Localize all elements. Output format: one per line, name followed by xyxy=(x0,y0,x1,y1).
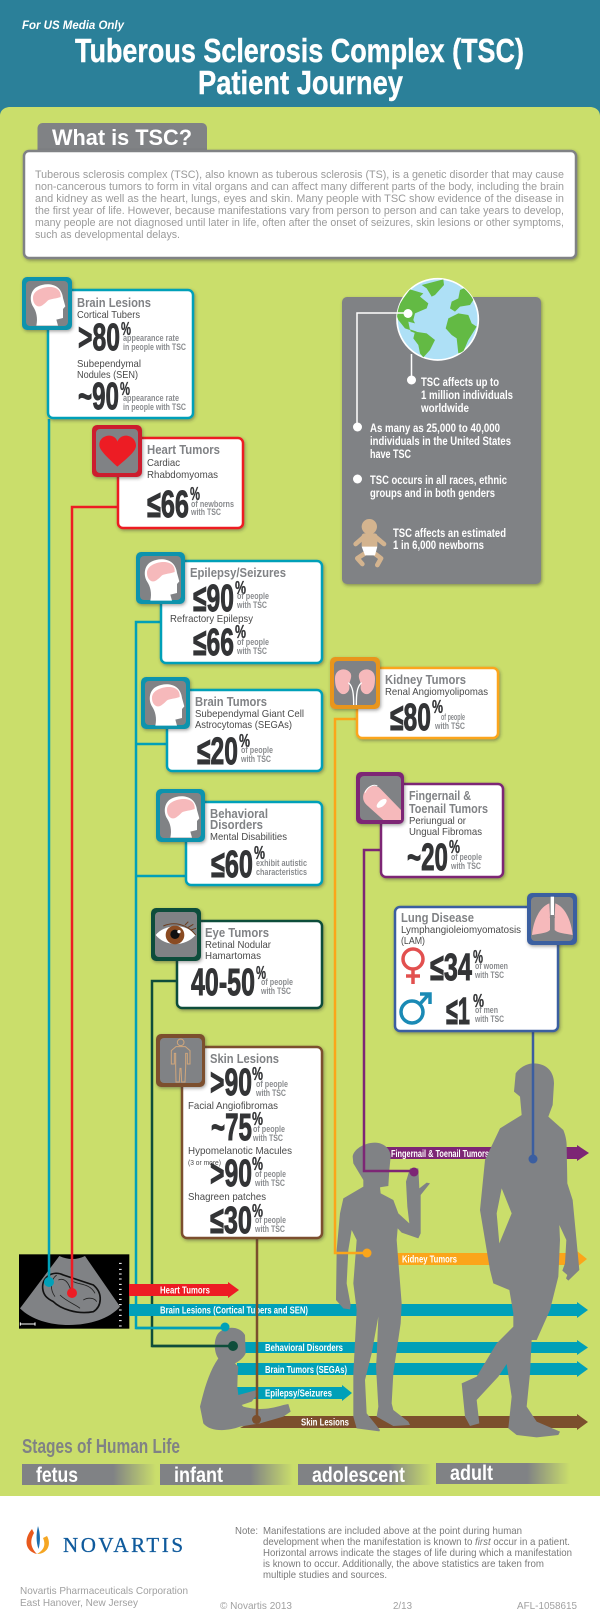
text: women statistic: with TSC xyxy=(474,970,504,981)
text: cortical tubers: Brain Lesions xyxy=(77,296,151,310)
text: mental disabilities: exhibit autistic xyxy=(256,858,307,869)
text: renal angiomyolipomas: % xyxy=(432,697,443,717)
text: skin lesions overall: Skin Lesions xyxy=(210,1052,279,1066)
fact: United States xyxy=(370,421,511,461)
panel: fingernail and toenail tumors xyxy=(356,772,503,879)
text: subependymal nodules xyxy=(77,358,186,418)
text: cardiac rhabdomyomas: with TSC xyxy=(190,507,221,518)
text: ungual fibromas: of people xyxy=(451,852,482,863)
arrow: behavioral disorders: Behavioral Disorders xyxy=(265,1343,343,1354)
stage: adolescent: adolescent xyxy=(312,1464,405,1487)
stage: infant xyxy=(160,1464,293,1487)
title xyxy=(75,32,524,101)
text: shagreen patches: with TSC xyxy=(254,1224,285,1235)
text: men statistic: of men xyxy=(475,1005,498,1016)
text: mental disabilities: Behavioral xyxy=(210,807,268,821)
text: facial angiofibromas: of people xyxy=(253,1124,285,1135)
text: retinal hamartomas: Retinal Nodular xyxy=(205,939,271,951)
text: subependymal nodules: in people with TSC xyxy=(123,402,186,413)
silhouette: adolescent xyxy=(336,1143,430,1431)
panel: lung disease xyxy=(395,893,577,1033)
media notice: For US Media Only xyxy=(22,18,125,32)
text: lymphangioleiomyomatosis: Lymphangioleiomyomatosis xyxy=(401,924,521,936)
fact: newborns xyxy=(393,526,506,552)
arrow: epilepsy: Epilepsy/Seizures xyxy=(265,1388,332,1400)
text: hypomelanotic macules: (3 or more) xyxy=(188,1160,221,1167)
text: cortical tubers: in people with TSC xyxy=(123,342,186,353)
text: subependymal nodules: appearance rate xyxy=(123,393,179,404)
connector: fingernail tumors to adolescent xyxy=(364,850,418,1176)
text: mental disabilities: characteristics xyxy=(256,867,307,878)
text: subependymal nodules: Subependymal xyxy=(77,358,141,370)
text: subependymal nodules: Nodules (SEN) xyxy=(77,369,138,381)
icon: lungs xyxy=(527,893,577,945)
text: lymphangioleiomyomatosis xyxy=(401,911,521,947)
arrow: brain lesions xyxy=(129,1302,588,1318)
footnote: Note: xyxy=(235,1525,258,1537)
fact: all races: groups and in both genders xyxy=(370,486,495,500)
text: epilepsy statistics: ≤90 xyxy=(193,578,234,620)
text: hypomelanotic macules: with TSC xyxy=(254,1178,285,1189)
connector: lung disease to adult xyxy=(528,1032,538,1164)
text: cardiac rhabdomyomas: % xyxy=(190,484,200,504)
stage: fetus: fetus xyxy=(36,1464,78,1487)
text: renal angiomyolipomas: Renal Angiomyolipomas xyxy=(385,686,488,698)
text: ungual fibromas xyxy=(407,789,488,879)
text: women statistic: of women xyxy=(475,961,508,972)
fact: all races xyxy=(370,473,507,500)
stage: fetus xyxy=(22,1464,156,1487)
icon: finger xyxy=(356,772,404,824)
text: renal angiomyolipomas: with TSC xyxy=(434,721,465,732)
panel: brain tumors xyxy=(141,677,322,773)
text: cardiac rhabdomyomas: of newborns xyxy=(191,499,234,510)
panel: brain lesions xyxy=(22,277,193,418)
text: men statistic: % xyxy=(473,991,484,1011)
text: facial angiofibromas xyxy=(188,1100,285,1149)
footnote: Manifestations are included above at the point during human xyxy=(263,1525,522,1537)
arrow: brain lesions: Brain Lesions (Cortical Tubers and SEN) xyxy=(160,1306,308,1316)
arrow: skin lesions: Skin Lesions xyxy=(301,1418,349,1428)
text: retinal hamartomas: % xyxy=(256,963,266,983)
fact: worldwide: 1 million individuals xyxy=(421,388,513,402)
text: epilepsy statistics: % xyxy=(235,578,246,598)
stage: adult xyxy=(436,1462,570,1485)
panel: what is TSC xyxy=(24,123,576,258)
panel: kidney tumors xyxy=(330,657,498,739)
text: shagreen patches: ≤30 xyxy=(210,1200,252,1242)
heading tab: What is TSC? xyxy=(52,125,192,150)
copyright line: © Novartis 2013 xyxy=(220,1600,292,1612)
text: mental disabilities: ≤60 xyxy=(211,844,253,886)
text: shagreen patches: % xyxy=(252,1201,263,1221)
fact: United States: have TSC xyxy=(370,447,411,461)
silhouette: infant xyxy=(200,1328,291,1430)
intro text box: and kidney as well as the heart, lungs, eyes and skin. Many people with TSC show evidence of the disease in xyxy=(35,193,564,205)
panel: heart tumors xyxy=(92,425,243,528)
fact: newborns: 1 in 6,000 newborns xyxy=(393,538,484,552)
text: refractory epilepsy: of people xyxy=(237,637,269,648)
connector: epilepsy, brain tumor and behavioral line xyxy=(136,622,225,1328)
text: SEGAs statistics: % xyxy=(239,731,250,751)
arrow: heart tumors: Heart Tumors xyxy=(160,1286,210,1296)
text: skin lesions overall: of people xyxy=(256,1079,288,1090)
footnote xyxy=(235,1525,572,1581)
text: hypomelanotic macules: >90 xyxy=(210,1153,252,1195)
fact: all races: TSC occurs in all races, ethnic xyxy=(370,473,507,487)
text: men statistic: with TSC xyxy=(474,1014,504,1025)
panel: skin lesions xyxy=(156,1034,322,1242)
fact: United States: As many as 25,000 to 40,000 xyxy=(370,421,500,435)
text: retinal hamartomas: Eye Tumors xyxy=(205,926,269,940)
text: hypomelanotic macules: % xyxy=(252,1154,263,1174)
arrow: heart tumors xyxy=(129,1282,239,1298)
text: SEGAs statistics: Astrocytomas (SEGAs) xyxy=(195,719,292,731)
text: lymphangioleiomyomatosis: Lung Disease xyxy=(401,911,474,925)
text: cortical tubers: appearance rate xyxy=(123,333,179,344)
text: epilepsy statistics xyxy=(190,566,286,620)
text: SEGAs statistics xyxy=(195,695,304,773)
text: mental disabilities: Disorders xyxy=(210,818,263,832)
connector: eye tumor line xyxy=(152,981,233,1346)
text: ungual fibromas: Periungual or xyxy=(409,815,466,827)
arrow: skin lesions xyxy=(240,1414,588,1430)
text: cortical tubers: Cortical Tubers xyxy=(77,309,140,321)
silhouette: adult xyxy=(462,1063,579,1437)
icon: heart xyxy=(92,425,142,477)
fact: worldwide: worldwide xyxy=(420,401,469,415)
Novartis logo xyxy=(27,1526,183,1557)
panel: epilepsy and seizures xyxy=(136,552,322,664)
text: lymphangioleiomyomatosis: (LAM) xyxy=(401,935,425,947)
text: retinal hamartomas: 40-50 xyxy=(191,962,255,1004)
title: Patient Journey xyxy=(198,64,404,101)
icon: globe xyxy=(395,279,478,360)
text: mental disabilities xyxy=(210,807,307,886)
text: subependymal nodules: ~90 xyxy=(78,376,119,418)
text: SEGAs statistics: of people xyxy=(241,745,273,756)
text: women statistic: % xyxy=(473,947,483,967)
text: retinal hamartomas: Hamartomas xyxy=(205,950,261,962)
fact: worldwide xyxy=(420,375,513,415)
text: retinal hamartomas: with TSC xyxy=(260,986,291,997)
fact: United States: individuals in the United States xyxy=(370,434,511,448)
stages of human life xyxy=(22,1436,570,1487)
arrow: epilepsy xyxy=(237,1385,352,1401)
panel: TSC statistics xyxy=(342,279,541,584)
icon: baby xyxy=(356,519,384,565)
copyright line: AFL-1058615 xyxy=(517,1600,577,1612)
text: cardiac rhabdomyomas: Heart Tumors xyxy=(147,443,220,457)
text: renal angiomyolipomas xyxy=(385,673,488,739)
text: ungual fibromas: Ungual Fibromas xyxy=(409,826,482,838)
arrow: brain tumors: Brain Tumors (SEGAs) xyxy=(265,1365,347,1376)
text: shagreen patches: Shagreen patches xyxy=(188,1191,266,1203)
text: shagreen patches xyxy=(188,1191,286,1242)
icon: eye xyxy=(151,908,201,961)
text: women statistic: ≤34 xyxy=(430,947,472,989)
text: facial angiofibromas: % xyxy=(252,1109,263,1129)
text: skin lesions overall: % xyxy=(252,1064,263,1084)
text: hypomelanotic macules xyxy=(188,1145,292,1195)
text: facial angiofibromas: with TSC xyxy=(252,1133,283,1144)
icon: male symbol xyxy=(401,994,430,1023)
arrow: kidney tumors: Kidney Tumors xyxy=(402,1254,457,1266)
stage: infant: infant xyxy=(174,1464,223,1487)
Novartis logo: NOVARTIS xyxy=(63,1533,183,1557)
text: subependymal nodules: % xyxy=(120,379,130,399)
text: skin lesions overall xyxy=(210,1052,288,1104)
text: SEGAs statistics: Subependymal Giant Cell xyxy=(195,708,304,720)
icon: body outline xyxy=(156,1034,205,1087)
icon: female symbol xyxy=(403,949,423,984)
text: refractory epilepsy: % xyxy=(235,622,246,642)
text: facial angiofibromas: ~75 xyxy=(211,1107,252,1149)
text: ungual fibromas: ~20 xyxy=(407,837,448,879)
connector: brain lesions to fetus xyxy=(44,419,54,1287)
text: epilepsy statistics: with TSC xyxy=(236,600,267,611)
text: cortical tubers: >80 xyxy=(78,317,120,359)
arrow: fingernail and toenail tumors xyxy=(385,1145,589,1161)
text: facial angiofibromas: Facial Angiofibromas xyxy=(188,1100,278,1112)
text: cardiac rhabdomyomas: Rhabdomyomas xyxy=(147,469,218,481)
text: skin lesions overall: >90 xyxy=(210,1062,252,1104)
text: retinal hamartomas: of people xyxy=(261,977,293,988)
text: hypomelanotic macules: of people xyxy=(255,1169,286,1180)
text: cortical tubers xyxy=(77,296,186,359)
text: ungual fibromas: % xyxy=(449,837,460,857)
fact: newborns: TSC affects an estimated xyxy=(393,526,506,540)
text: SEGAs statistics: Brain Tumors xyxy=(195,695,267,709)
panel: eye tumors xyxy=(151,908,322,1008)
icon: head with brain xyxy=(156,789,205,842)
arrow: behavioral disorders xyxy=(240,1340,588,1355)
text: SEGAs statistics: ≤20 xyxy=(197,731,238,773)
icon: head with brain xyxy=(141,677,190,729)
connector dot: infant head teal xyxy=(136,1322,230,1332)
text: SEGAs statistics: with TSC xyxy=(240,754,271,765)
text: retinal hamartomas xyxy=(191,926,293,1004)
connector: kidney tumors to adolescent xyxy=(335,719,372,1258)
intro text box: non-cancerous tumors to form in vital organs and can affect many different parts of the body, including the brain xyxy=(35,181,564,193)
icon: head with brain xyxy=(22,277,72,330)
arrow: brain tumors xyxy=(237,1361,588,1377)
copyright line: 2/13 xyxy=(393,1600,412,1612)
text: refractory epilepsy: Refractory Epilepsy xyxy=(170,613,254,625)
heading: Stages of Human Life xyxy=(22,1436,180,1458)
icon: head with brain xyxy=(136,552,185,604)
text: cardiac rhabdomyomas xyxy=(147,443,234,526)
text: cardiac rhabdomyomas: ≤66 xyxy=(147,484,189,526)
ultrasound image: fetus xyxy=(19,1254,129,1329)
intro text box xyxy=(24,151,576,258)
intro text box: many people are not diagnosed until later in life, often after the onset of seizures, skin lesions or other symptoms, xyxy=(35,217,564,229)
intro text box: the first year of life. However, because manifestations vary from person to person and can take years to develop, xyxy=(35,205,564,217)
text: refractory epilepsy: with TSC xyxy=(236,646,267,657)
intro text box: Tuberous sclerosis complex (TSC), also known as tuberous sclerosis (TS), is a genetic disorder that may cause xyxy=(35,169,564,181)
text: hypomelanotic macules: Hypomelanotic Macules xyxy=(188,1145,292,1157)
company address: Novartis Pharmaceuticals Corporation xyxy=(20,1585,188,1597)
callout lines and dots xyxy=(353,309,416,484)
text: refractory epilepsy xyxy=(170,613,269,664)
text: men statistic: ≤1 xyxy=(446,991,470,1033)
fact: worldwide: TSC affects up to xyxy=(421,375,499,389)
arrow: fingernail and toenail tumors: Fingernail & Toenail Tumors xyxy=(391,1149,489,1160)
text: cardiac rhabdomyomas: Cardiac xyxy=(147,457,180,469)
connector: heart tumors to fetus xyxy=(67,507,118,1298)
text: renal angiomyolipomas: Kidney Tumors xyxy=(385,673,466,687)
footer background xyxy=(0,1496,600,1616)
stage: adult: adult xyxy=(450,1462,493,1485)
text: epilepsy statistics: Epilepsy/Seizures xyxy=(190,566,286,580)
connector dot: infant head green xyxy=(152,1341,238,1351)
text: renal angiomyolipomas: ≤80 xyxy=(390,697,431,739)
icon: kidneys xyxy=(330,657,380,709)
text: ungual fibromas: Fingernail & xyxy=(409,789,471,803)
text: shagreen patches: of people xyxy=(255,1215,286,1226)
text: renal angiomyolipomas: of people xyxy=(441,712,465,723)
arrow: kidney tumors xyxy=(396,1251,587,1267)
text: skin lesions overall: with TSC xyxy=(255,1088,286,1099)
copyright line xyxy=(220,1600,577,1612)
footnote: is known to occur. Additionally, the above statistics are taken from xyxy=(263,1558,544,1570)
footnote: development when the manifestation is known to first occur in a patient. xyxy=(263,1536,570,1548)
text: mental disabilities: % xyxy=(254,843,265,863)
intro text box: such as developmental delays. xyxy=(35,229,180,241)
header band xyxy=(0,0,600,116)
text: epilepsy statistics: of people xyxy=(237,591,269,602)
text: cortical tubers: % xyxy=(121,319,131,339)
footnote: multiple studies and sources. xyxy=(263,1569,387,1581)
text: ungual fibromas: with TSC xyxy=(450,861,481,872)
text: ungual fibromas: Toenail Tumors xyxy=(409,802,488,816)
panel: behavioral disorders xyxy=(156,789,322,886)
text: refractory epilepsy: ≤66 xyxy=(193,622,234,664)
footnote: Horizontal arrows indicate the stages of life during which a manifestation xyxy=(263,1547,572,1559)
company address xyxy=(20,1585,188,1609)
text: mental disabilities: Mental Disabilities xyxy=(210,831,287,843)
connector: skin lesions to infant xyxy=(252,1239,261,1424)
company address: East Hanover, New Jersey xyxy=(20,1597,139,1609)
